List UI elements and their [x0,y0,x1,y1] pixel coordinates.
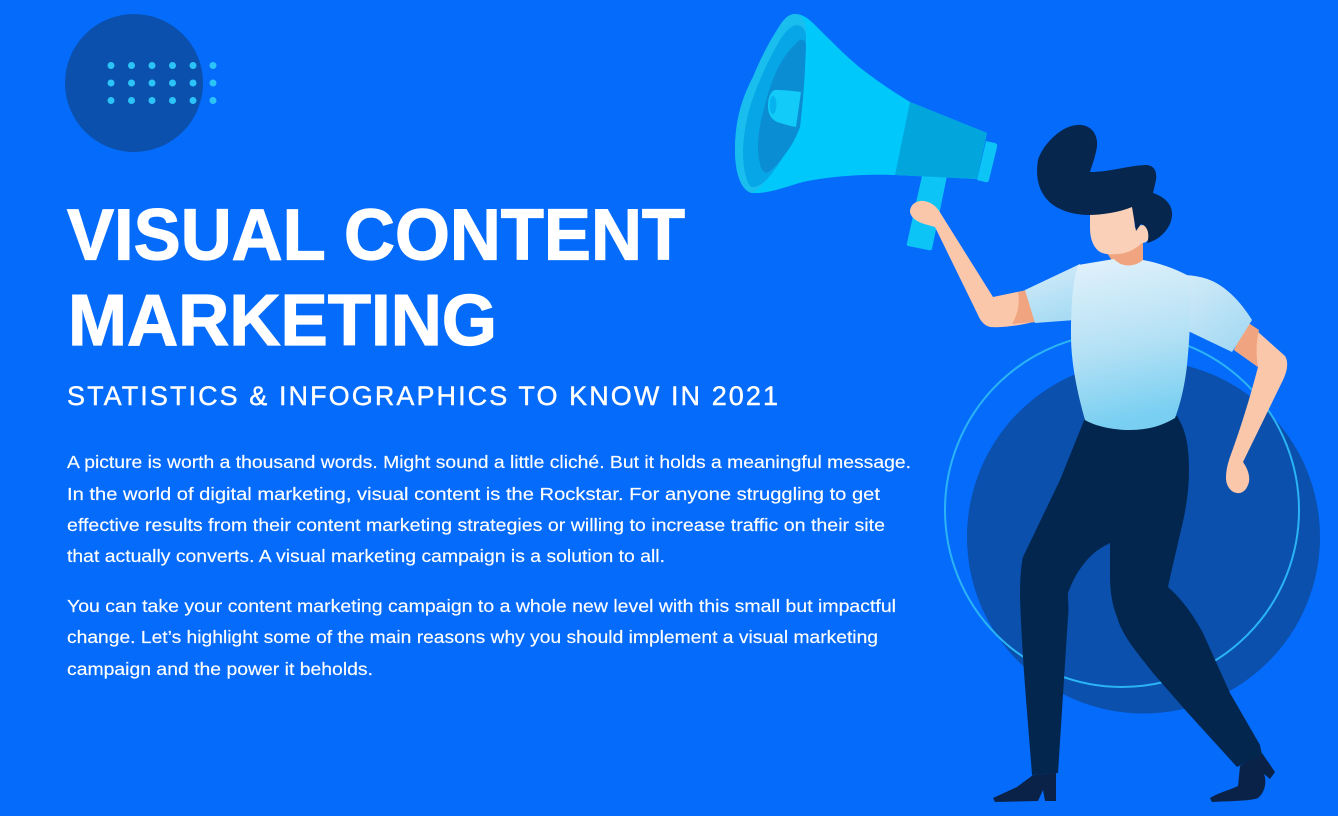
left sleeve [1025,264,1080,323]
megaphone inner ring [743,25,806,187]
left arm shadow [1012,290,1036,324]
right shoe [1210,753,1275,802]
left arm [910,201,1034,327]
neck shadow [1105,238,1143,267]
title [67,196,685,361]
trousers [1020,416,1262,775]
title: VISUAL CONTENT [67,196,685,276]
second paragraph: You can take your content marketing campaign to a whole new level with this small but impactful [67,596,896,616]
subtitle: STATISTICS & INFOGRAPHICS TO KNOW IN 2021 [67,381,778,411]
intro paragraph: effective results from their content marketing strategies or willing to increase traffic on their site [67,515,885,535]
person [910,125,1287,802]
second paragraph: change. Let’s highlight some of the main reasons why you should implement a visual marketing [67,627,878,647]
megaphone handle [907,176,947,250]
right arm shadow [1234,322,1259,367]
backdrop ring [945,333,1299,687]
shirt [1071,259,1190,430]
title: MARKETING [68,281,497,361]
megaphone cone [758,40,806,173]
megaphone rim [735,14,806,193]
icon: megaphone [735,14,997,250]
intro paragraph: that actually converts. A visual marketing campaign is a solution to all. [67,546,665,566]
second paragraph [67,596,896,679]
second paragraph: campaign and the power it beholds. [67,659,373,679]
backdrop circle [967,360,1320,714]
right arm [1226,322,1287,493]
left shoe [993,773,1056,802]
megaphone end cap [977,141,997,182]
intro paragraph: In the world of digital marketing, visual content is the Rockstar. For anyone struggling to get [67,484,880,504]
intro paragraph: A picture is worth a thousand words. Might sound a little cliché. But it holds a meaningful message. [67,452,911,472]
megaphone driver [768,90,801,127]
hair [1037,125,1172,243]
badge: circle with dot grid [65,14,216,152]
face [1090,205,1150,254]
right sleeve [1185,275,1252,352]
intro paragraph [67,452,911,566]
megaphone dark tail [895,102,987,179]
megaphone horn [735,14,987,193]
